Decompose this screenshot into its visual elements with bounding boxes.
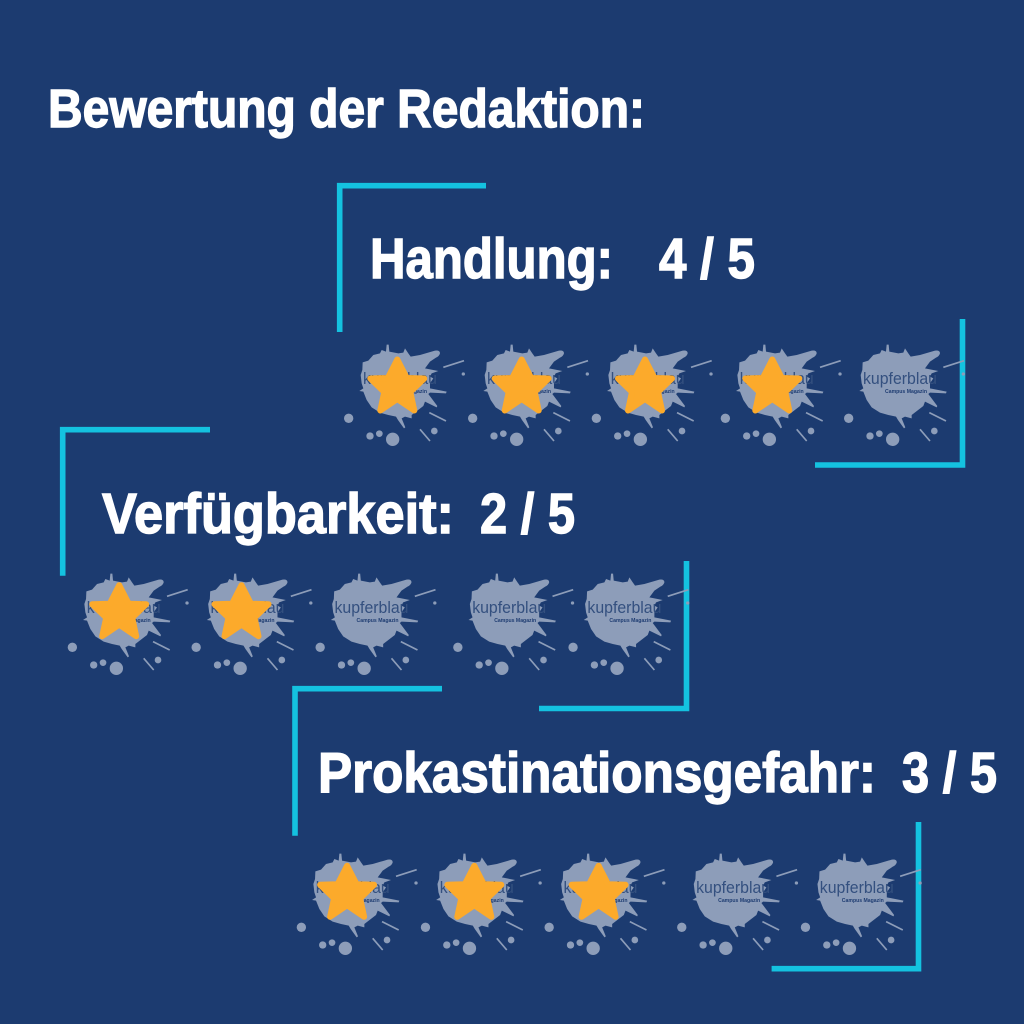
rating logo 2 filled: kupferblau	[210, 598, 284, 617]
score: 3 / 5: 3 / 5	[902, 741, 997, 805]
rating logo 2 filled: kupferblau	[440, 878, 514, 897]
rating logo 3 filled	[592, 345, 713, 446]
rating logo 2 filled: Campus Magazin	[232, 618, 274, 624]
rating logo 2 filled: kupferblau	[487, 369, 561, 388]
bracket: bottom right	[815, 319, 962, 465]
heading: Handlung: Handlung:	[370, 227, 613, 291]
bracket: top left	[295, 689, 442, 836]
rating logo 1 filled: Campus Magazin	[109, 618, 151, 624]
rating logo 4 filled: kupferblau	[740, 369, 814, 388]
rating logo 5 empty: Campus Magazin	[885, 389, 927, 395]
rating logo 3 filled: kupferblau	[564, 878, 638, 897]
rating logo 3 filled: Campus Magazin	[586, 898, 628, 904]
rating logo 5 empty	[801, 854, 922, 955]
rating logo 2 filled	[468, 345, 589, 446]
rating logo 1 filled	[297, 854, 418, 955]
rating logo 5 empty: kupferblau	[587, 598, 661, 617]
rating logo 1 filled: kupferblau	[363, 369, 437, 388]
bracket: bottom right	[772, 822, 918, 969]
panel: Handlung rating	[340, 186, 965, 465]
rating logo 3 filled: Campus Magazin	[633, 389, 675, 395]
rating logo 4 empty: Campus Magazin	[718, 898, 760, 904]
star 1	[92, 585, 146, 636]
rating logo 3 filled: kupferblau	[611, 369, 685, 388]
rating logo 4 empty	[453, 574, 574, 675]
rating logo 4 filled: Campus Magazin	[762, 389, 804, 395]
rating logo 1 filled	[68, 574, 189, 675]
star 2	[447, 866, 501, 917]
rating logo 3 empty: kupferblau	[334, 598, 408, 617]
rating logo 3 filled	[544, 854, 665, 955]
star 2	[495, 360, 549, 410]
rating logo 4 empty: kupferblau	[472, 598, 546, 617]
rating logo 2 filled: Campus Magazin	[509, 389, 551, 395]
rating logo 5 empty	[568, 574, 689, 675]
rating logo 4 empty	[677, 854, 798, 955]
heading: Verfügbarkeit: Verfügbarkeit:	[102, 482, 454, 546]
bracket: top left	[63, 430, 210, 576]
rating logo 3 empty	[315, 574, 436, 675]
panel: Prokastinationsgefahr rating	[295, 689, 997, 969]
rating logo 4 empty: Campus Magazin	[494, 618, 536, 624]
bracket: bottom right	[539, 561, 686, 708]
rating logo 5 empty: Campus Magazin	[609, 618, 651, 624]
rating logo 2 filled: Campus Magazin	[462, 898, 504, 904]
rating logo 1 filled	[344, 345, 465, 446]
rating logo 1 filled: kupferblau	[316, 878, 390, 897]
star 3	[572, 866, 626, 917]
heading: Prokastinationsgefahr: Prokastinationsgefahr:	[318, 741, 876, 805]
panel: Verfügbarkeit rating	[63, 430, 689, 708]
bracket: top left	[340, 186, 486, 332]
star 1	[370, 360, 424, 410]
score: 4 / 5: 4 / 5	[659, 227, 755, 291]
star 4	[745, 360, 799, 410]
star 1	[320, 866, 374, 917]
rating logo 5 empty: kupferblau	[863, 369, 937, 388]
star 2	[214, 585, 268, 636]
rating logo 2 filled	[421, 854, 542, 955]
rating logo 4 empty: kupferblau	[696, 878, 770, 897]
rating logo 5 empty	[844, 345, 965, 446]
rating logo 1 filled: kupferblau	[87, 598, 161, 617]
score: 2 / 5: 2 / 5	[480, 482, 575, 546]
rating logo 1 filled: Campus Magazin	[338, 898, 380, 904]
rating logo 5 empty: Campus Magazin	[842, 898, 884, 904]
rating logo 4 filled	[721, 345, 842, 446]
rating logo 3 empty: Campus Magazin	[356, 618, 398, 624]
rating logo 2 filled	[191, 574, 312, 675]
star 3	[618, 360, 672, 410]
rating logo 1 filled: Campus Magazin	[385, 389, 427, 395]
title: Bewertung der Redaktion:	[48, 79, 645, 139]
rating logo 5 empty: kupferblau	[820, 878, 894, 897]
